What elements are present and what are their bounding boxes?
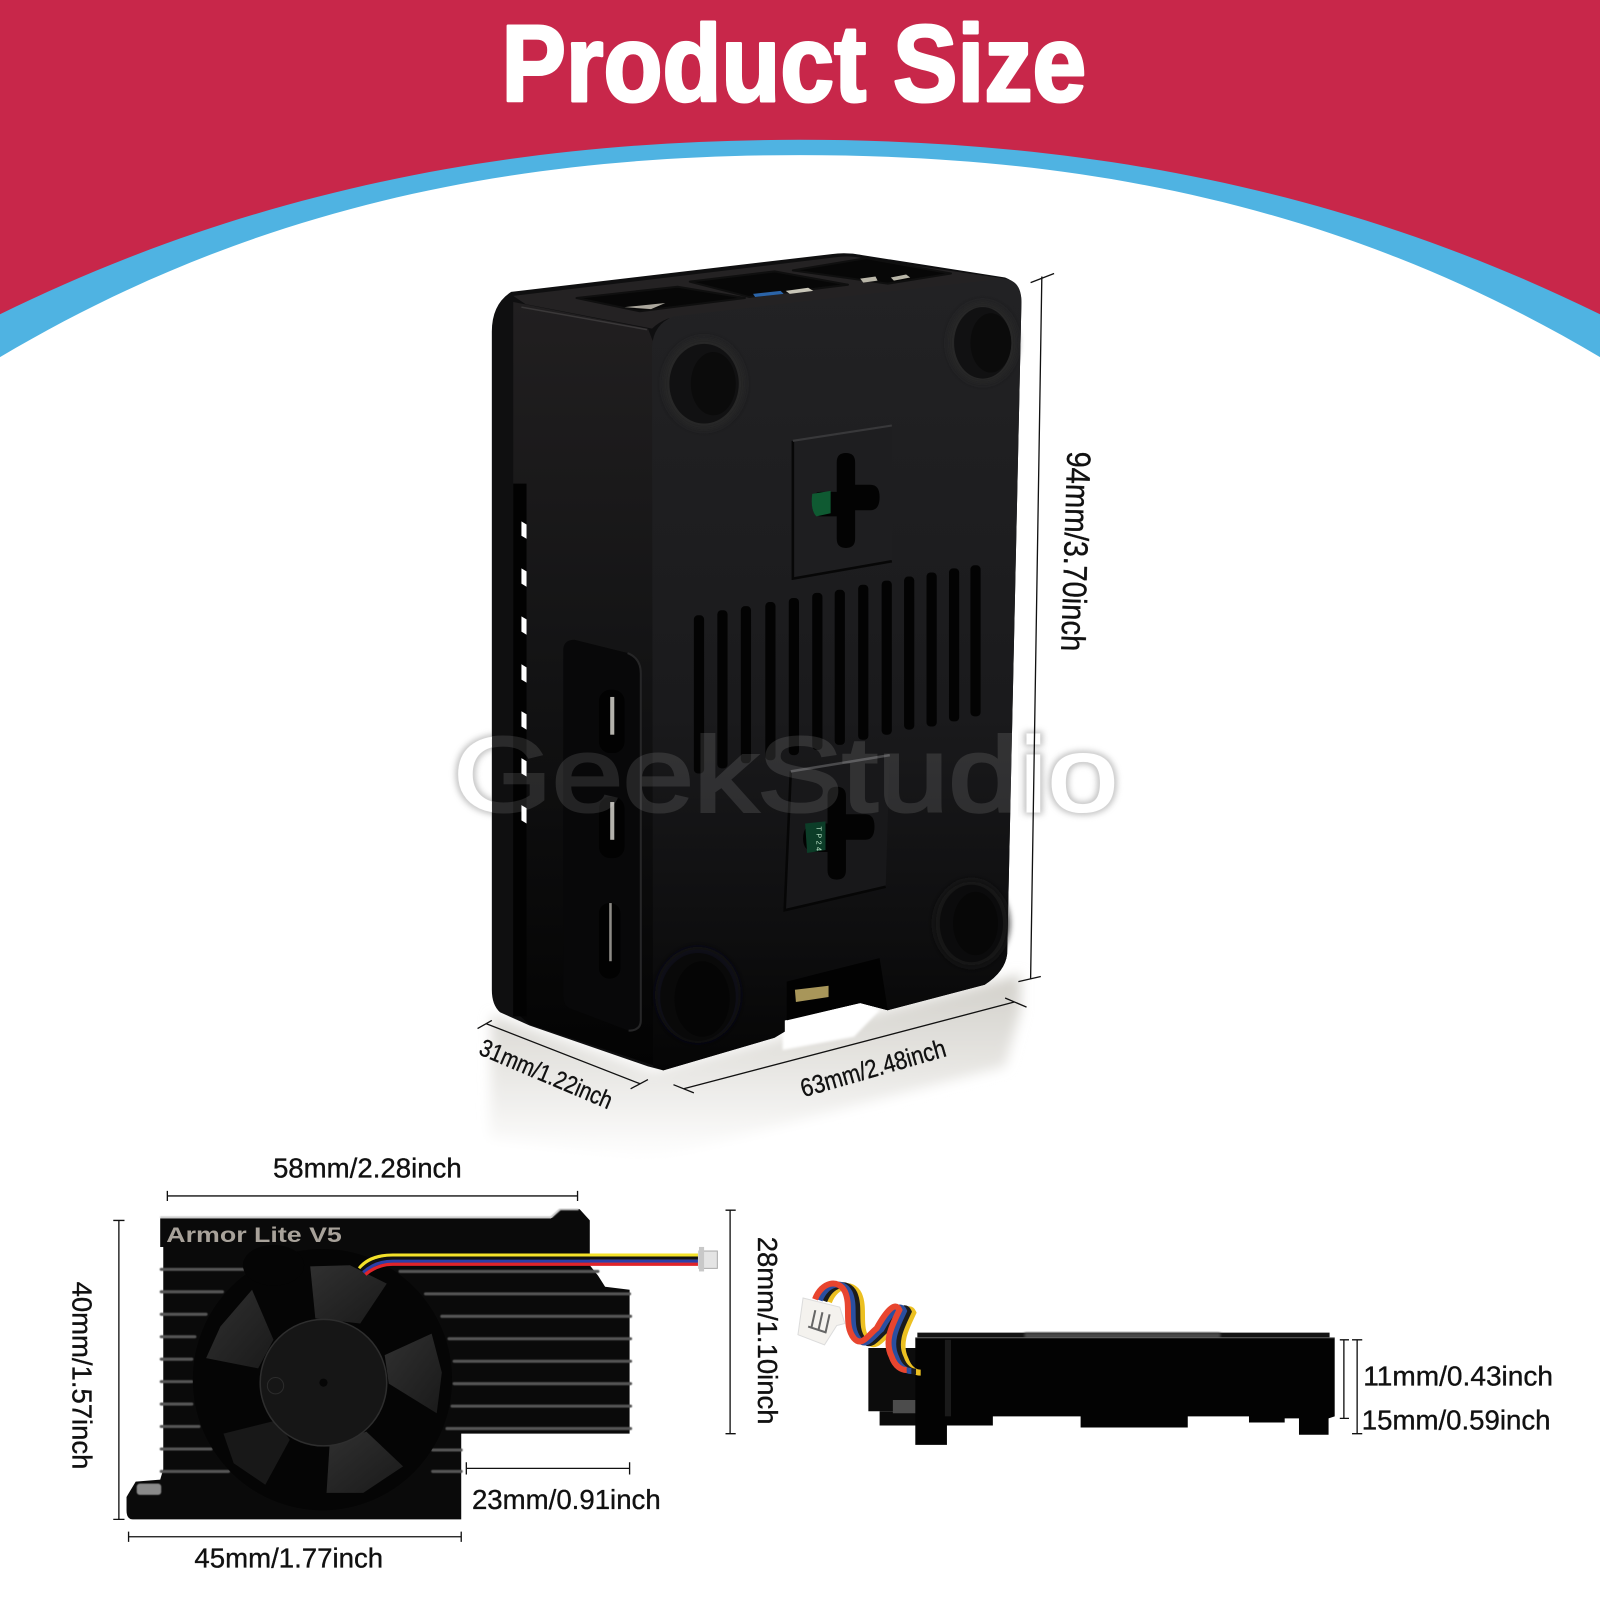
- dimension: 11mm: 11mm/0.43inch: [1363, 1361, 1553, 1392]
- case top surface: [513, 256, 1005, 329]
- fan: [193, 1245, 452, 1510]
- fan cable: [359, 1255, 698, 1274]
- dimension: height 94mm: [1018, 273, 1096, 982]
- dimension: 11mm: [1340, 1340, 1553, 1418]
- port 1: [599, 690, 624, 753]
- heatsink top view: [127, 1209, 717, 1519]
- dimension: width 63mm: 63mm/2.48inch: [797, 1035, 949, 1103]
- vent slots: [694, 565, 981, 773]
- dimension: 58mm: 58mm/2.28inch: [273, 1153, 462, 1184]
- port 2: [599, 797, 624, 858]
- dimension: 15mm: [1352, 1340, 1551, 1436]
- bottom notch with connector: [787, 958, 888, 1020]
- dimension: 40mm: [66, 1220, 124, 1519]
- product: black case: [492, 253, 1021, 1070]
- mounting plate 1: [793, 426, 892, 579]
- model text: Armor Lite V5: [166, 1223, 342, 1247]
- watermark: [452, 728, 1120, 818]
- dimension: width 63mm: [673, 998, 1027, 1103]
- fan hub: [260, 1319, 387, 1446]
- dimension: 45mm: 45mm/1.77inch: [194, 1542, 383, 1573]
- port 3: [599, 903, 620, 979]
- top opening 2: [690, 271, 848, 297]
- top opening 3: [793, 258, 951, 284]
- mounting plate 2: [785, 755, 890, 910]
- dimension: 23mm: 23mm/0.91inch: [472, 1484, 661, 1515]
- keyhole cross 2: [803, 787, 874, 880]
- foot boss bottom left: [655, 947, 741, 1043]
- foot boss bottom right: [934, 880, 1009, 967]
- side vent strip: [513, 484, 527, 1016]
- fan blades: [206, 1265, 442, 1493]
- dimension: 28mm: 28mm/1.10inch: [752, 1237, 783, 1424]
- cable bundle: [815, 1284, 921, 1373]
- heatsink body: [127, 1209, 630, 1519]
- top fan edge: [917, 1333, 1330, 1341]
- side body: [915, 1338, 1335, 1445]
- heatsink side view: [798, 1284, 1335, 1445]
- dimension: 45mm: [129, 1532, 461, 1573]
- case silhouette: [492, 253, 1021, 1070]
- watermark: GeekStudio: [453, 716, 1118, 834]
- left side face: [513, 302, 653, 1065]
- blue arc: [0, 140, 1600, 357]
- title: Product Size: [502, 3, 1086, 124]
- dimension: 28mm: [726, 1210, 783, 1434]
- header band: [0, 0, 1600, 357]
- watermark: GeekStudio: [453, 716, 1118, 834]
- cable connector: [699, 1247, 717, 1271]
- left fins: [161, 1269, 249, 1471]
- port panel: [563, 640, 641, 1031]
- watermark: GeekStudio: [453, 716, 1118, 834]
- mounting plate 2: TP24: [814, 827, 822, 851]
- dimension: 15mm: 15mm/0.59inch: [1362, 1405, 1551, 1436]
- foot boss top left: [663, 338, 745, 430]
- front face: [652, 279, 1021, 1070]
- side rear block: [868, 1348, 917, 1411]
- side connector: [798, 1298, 845, 1345]
- right fins: [400, 1271, 631, 1471]
- dimension: 58mm: [167, 1153, 578, 1201]
- top opening 1: [577, 287, 745, 311]
- dimension: height 94mm: 94mm/3.70inch: [1053, 451, 1096, 652]
- foot boss top right: [948, 302, 1017, 384]
- dimension: 40mm: 40mm/1.57inch: [66, 1282, 97, 1469]
- raised edge highlights: [160, 1209, 579, 1217]
- dimension: 23mm: [466, 1462, 661, 1515]
- dimension: depth 31mm: 31mm/1.22inch: [475, 1035, 616, 1115]
- case reflection: [490, 974, 1020, 1158]
- keyhole cross 1: [812, 453, 880, 548]
- rear block grey tab: [893, 1400, 919, 1413]
